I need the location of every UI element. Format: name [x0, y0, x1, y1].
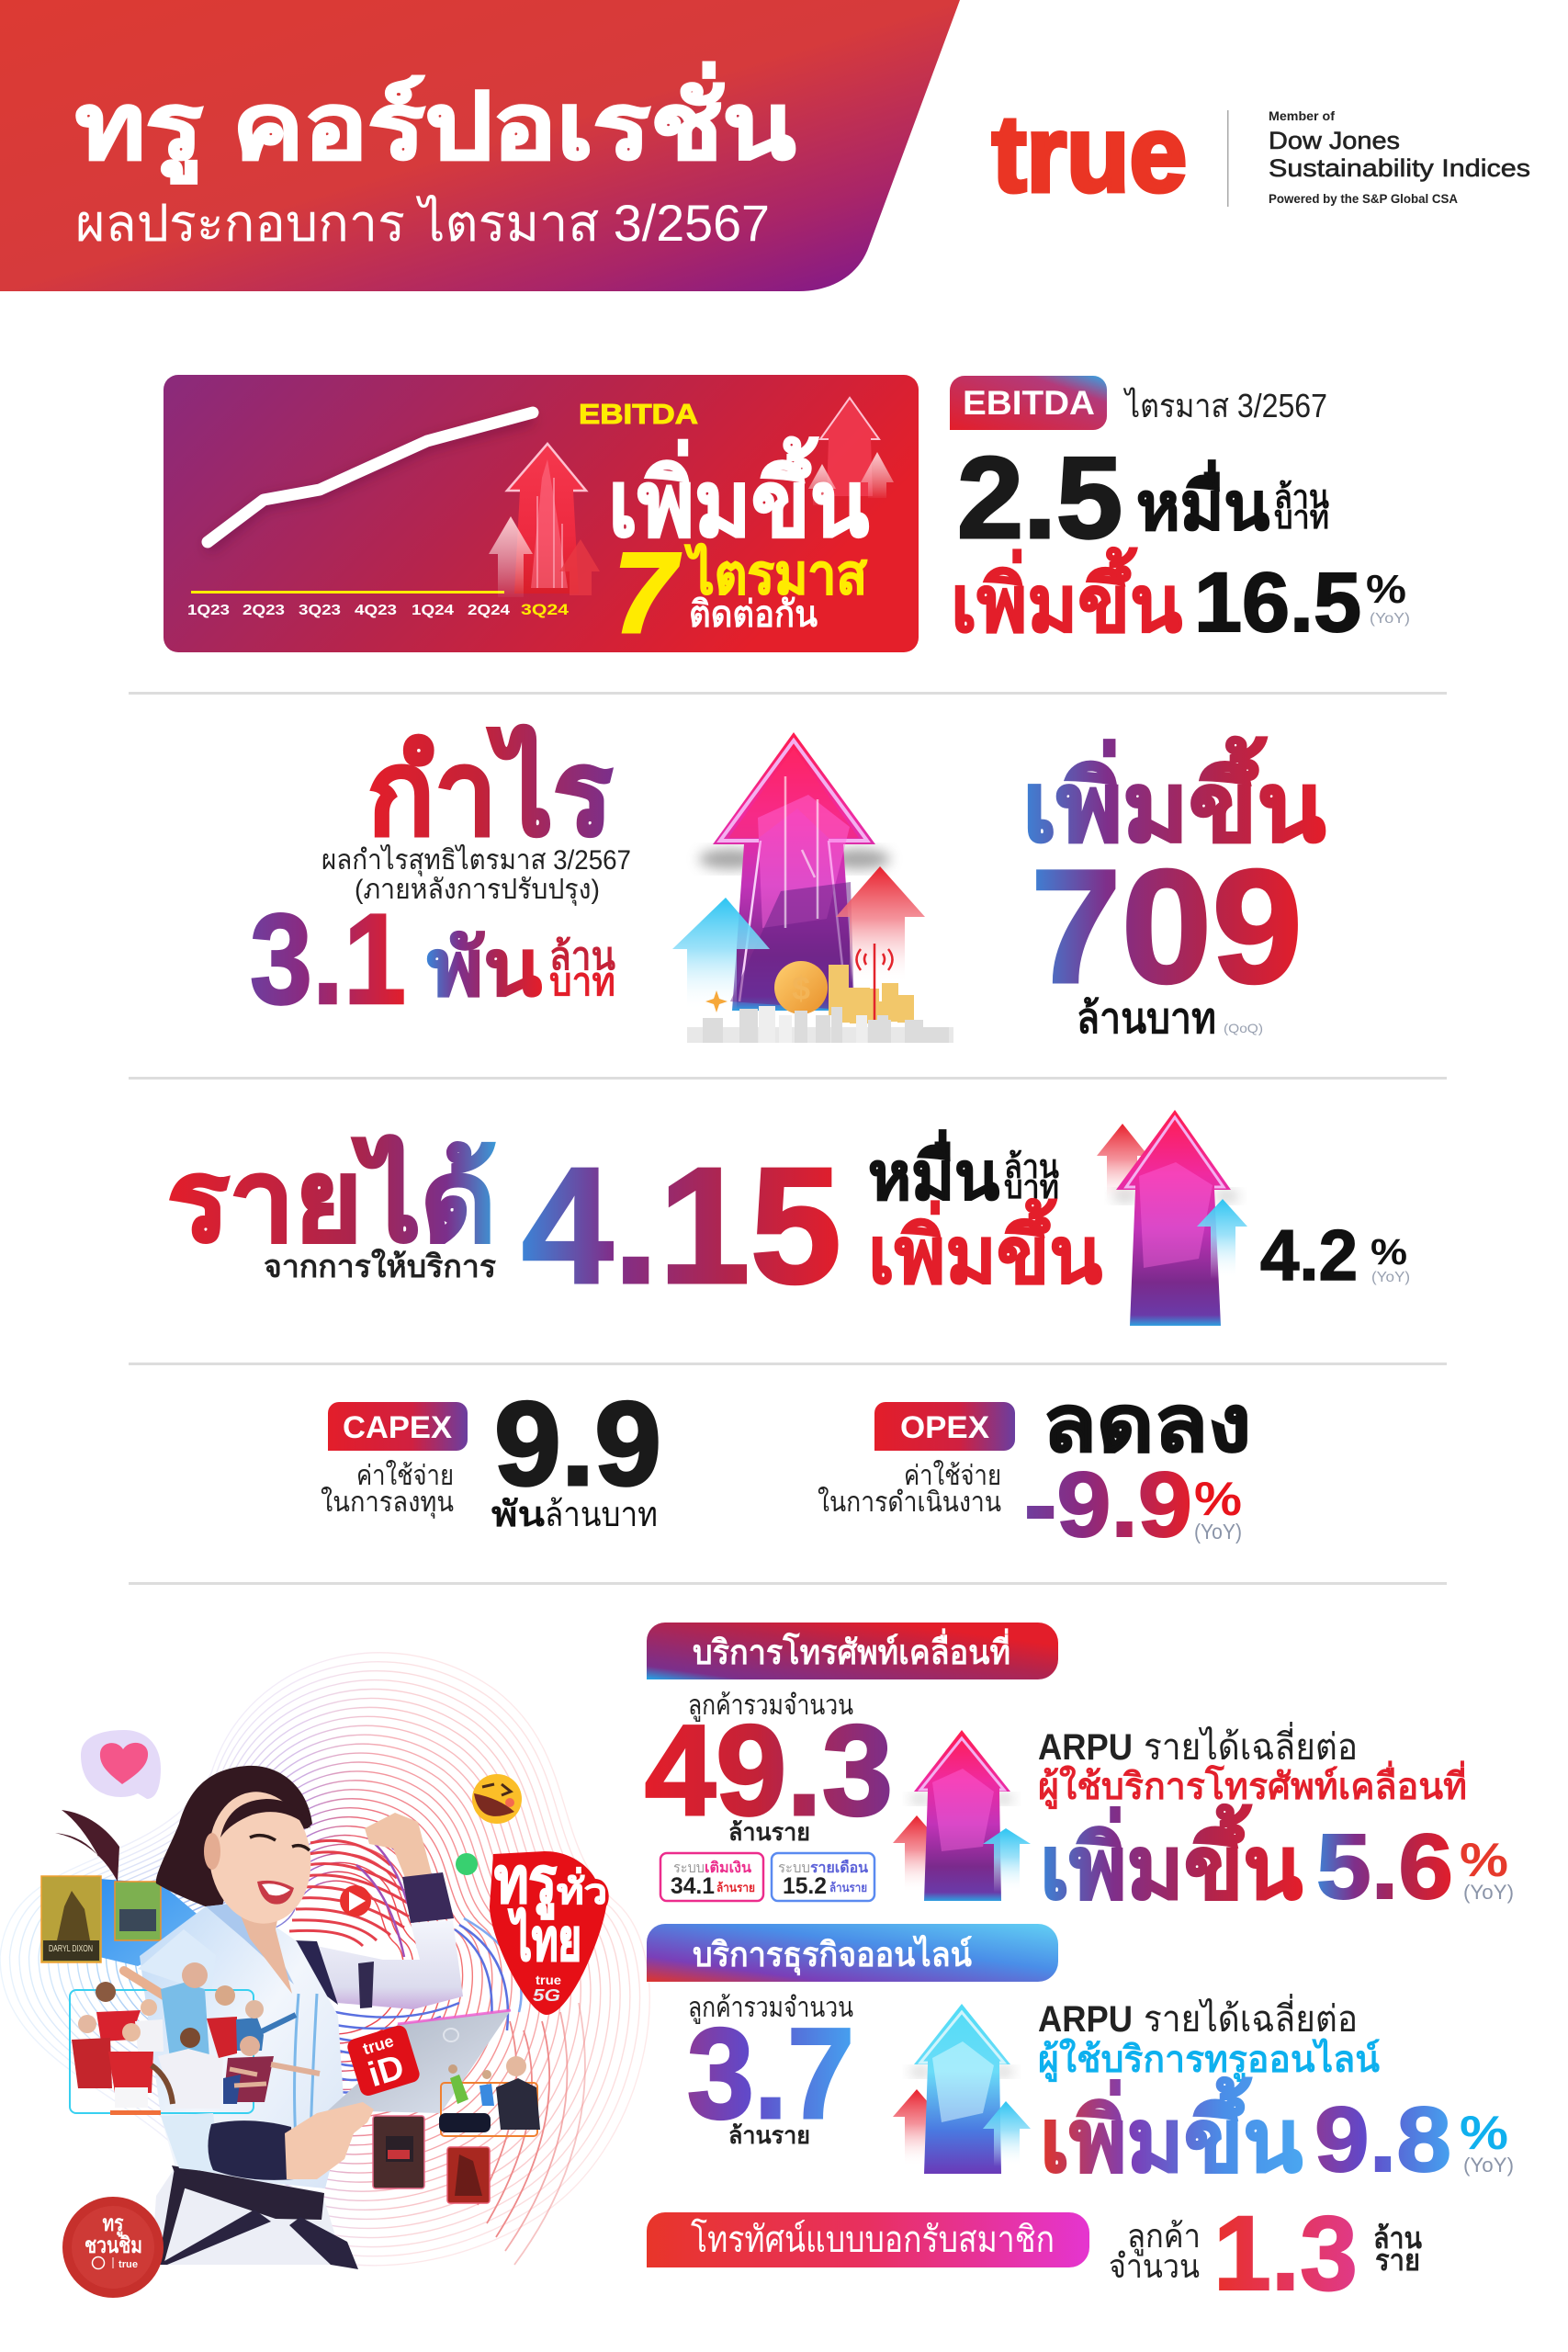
- CAPEX unit: พัน: [491, 1496, 545, 1534]
- EBITDA growth: (YoY): [1370, 611, 1410, 627]
- section: online business: [647, 1924, 1514, 2191]
- ARPU mobile growth: [1040, 1804, 1514, 1918]
- section: revenue: [167, 1110, 1410, 1326]
- icon: laughing emoji: [472, 1774, 522, 1824]
- revenue heading: รายได้: [167, 1136, 496, 1265]
- line chart: 3Q24: [521, 601, 570, 618]
- city skyline: [687, 1006, 953, 1043]
- line chart: 4Q23: [355, 603, 397, 618]
- profit increase unit: ล้านบาท: [1077, 994, 1216, 1042]
- revenue growth value: 4.2: [1260, 1215, 1358, 1295]
- icon: mobile arrows: [893, 1730, 1031, 1901]
- panel: EBITDA increase: [164, 375, 919, 657]
- pay TV unit: ราย: [1375, 2244, 1420, 2277]
- revenue unit: ล้าน: [1004, 1148, 1059, 1185]
- online subscribers value: 3.7: [687, 2001, 854, 2145]
- online subscribers unit: ล้านราย: [728, 2121, 810, 2149]
- profit description: (ภายหลังการปรับปรุง): [355, 875, 600, 907]
- EBITDA unit: [1136, 459, 1329, 544]
- icon: phone: [456, 1853, 478, 1875]
- profit heading: กำไร: [367, 725, 613, 860]
- section: mobile service: [645, 1623, 1514, 1918]
- section: profit: [250, 725, 1325, 1043]
- OPEX description: ค่าใช้จ่าย: [904, 1460, 1001, 1491]
- content tile: olive poster: DARYL DIXON: [49, 1944, 93, 1954]
- line chart: 1Q23: [187, 603, 230, 618]
- badge: true 5G pick: ทั่ว: [557, 1867, 607, 1912]
- woman jacket and raised arm: [138, 1813, 463, 2188]
- seven quarters: ไตรมาส: [683, 542, 867, 605]
- prepaid box: [660, 1853, 763, 1901]
- ARPU online text: ผู้ใช้บริการทรูออนไลน์: [1038, 2038, 1380, 2082]
- OPEX description: ในการดำเนินงาน: [818, 1487, 1001, 1518]
- online heading pill: [647, 1924, 1058, 1982]
- illustration: woman with True ID content: [0, 1653, 649, 2298]
- badge: True invites: true: [118, 2259, 138, 2270]
- OPEX pill: [874, 1402, 1015, 1451]
- content box: sports: [439, 2056, 540, 2136]
- subscribers unit: ล้านราย: [728, 1818, 810, 1846]
- postpaid box: [772, 1853, 874, 1901]
- postpaid box: 15.2: [783, 1873, 827, 1899]
- seven quarters: 7: [614, 530, 681, 657]
- icon: play button: [340, 1885, 371, 1917]
- icon: spark: [705, 990, 728, 1012]
- badge: true 5G pick: true: [536, 1973, 561, 1987]
- ARPU online growth: [1040, 2076, 1514, 2191]
- revenue unit: หมื่น: [868, 1129, 999, 1214]
- woman lower body and harness: [152, 2165, 358, 2269]
- OPEX pill: OPEX: [900, 1410, 989, 1445]
- OPEX value: %: [1194, 1473, 1242, 1526]
- content tile: series poster: [373, 2116, 424, 2188]
- badge: True invites: ชวนชิม: [85, 2233, 142, 2258]
- line chart: [187, 413, 570, 618]
- profit increase value: 709: [1031, 837, 1303, 1017]
- true logo and Dow Jones membership: Member of: [1269, 108, 1335, 123]
- profit value: บาท: [549, 960, 615, 1003]
- EBITDA pill: EBITDA: [963, 384, 1095, 422]
- CAPEX description: ในการลงทุน: [321, 1487, 454, 1520]
- EBITDA unit: หมื่น: [1136, 459, 1269, 544]
- EBITDA figures: [950, 376, 1410, 650]
- profit value: 3.1: [250, 887, 406, 1031]
- revenue growth value: (YoY): [1371, 1270, 1410, 1285]
- profit description: ผลกำไรสุทธิไตรมาส 3/2567: [321, 843, 631, 877]
- profit description: [321, 843, 631, 907]
- icon: revenue arrows: [1097, 1110, 1247, 1326]
- badge: true 5G pick: ไทย: [508, 1907, 581, 1973]
- icon: heart bubble: [81, 1730, 161, 1799]
- ARPU online growth: (YoY): [1463, 2154, 1514, 2177]
- pay TV pill: [647, 2212, 1089, 2267]
- icon: true ID logo: [345, 2023, 422, 2098]
- profit increase unit: (QoQ): [1224, 1021, 1263, 1035]
- EBITDA unit: ล้าน: [1274, 478, 1329, 515]
- pay TV unit: ล้าน: [1373, 2222, 1422, 2255]
- icon: tower: [856, 944, 893, 1020]
- woman neck and face: [201, 1785, 319, 1994]
- ARPU mobile text: ผู้ใช้บริการโทรศัพท์เคลื่อนที่: [1038, 1760, 1467, 1809]
- badge: true 5G pick: [490, 1846, 609, 2015]
- revenue growth value: %: [1371, 1232, 1407, 1272]
- icon: panel arrows: [489, 398, 894, 597]
- illustration: growth arrows with coin and city: [672, 732, 953, 1043]
- EBITDA label: EBITDA: [579, 398, 698, 430]
- prepaid box: เติมเงิน: [705, 1860, 751, 1876]
- ARPU online text: รายได้เฉลี่ยต่อ: [1144, 1994, 1358, 2040]
- CAPEX description: ค่าใช้จ่าย: [356, 1460, 454, 1491]
- revenue unit: [868, 1129, 1059, 1214]
- content tile: olive poster: [41, 1876, 101, 1962]
- ARPU mobile growth: 5.6: [1316, 1815, 1453, 1918]
- CAPEX unit: ล้านบาท: [545, 1496, 658, 1534]
- ARPU mobile growth: %: [1460, 1834, 1508, 1887]
- ARPU online text: [1038, 1994, 1380, 2082]
- badge: True invites: [62, 2197, 164, 2298]
- icon: coin: $: [792, 969, 810, 1007]
- mobile heading pill: [647, 1623, 1058, 1679]
- EBITDA growth: %: [1366, 567, 1406, 612]
- prepaid box: ระบบ: [673, 1860, 705, 1876]
- pay TV label: จำนวน: [1109, 2247, 1200, 2285]
- true logo and Dow Jones membership: true: [992, 94, 1187, 215]
- icon: coin: [774, 961, 828, 1014]
- EBITDA growth: เพิ่มขึ้น: [951, 547, 1182, 649]
- pay TV unit: [1373, 2222, 1422, 2277]
- CAPEX pill: [328, 1402, 468, 1451]
- postpaid box: รายเดือน: [810, 1860, 868, 1876]
- ARPU online text: ARPU: [1038, 1999, 1133, 2040]
- revenue unit: บาท: [1004, 1168, 1059, 1205]
- title: ทรู คอร์ปอเรชั่น: [75, 62, 795, 184]
- section: pay TV: [647, 2195, 1422, 2312]
- seven quarters: [614, 530, 867, 657]
- prepaid box: 34.1: [671, 1873, 715, 1899]
- ARPU mobile growth: (YoY): [1463, 1881, 1514, 1904]
- ARPU mobile text: [1038, 1722, 1467, 1809]
- profit value: พัน: [427, 925, 542, 1012]
- CAPEX pill: CAPEX: [343, 1410, 452, 1445]
- seven quarters: ติดต่อกัน: [689, 594, 818, 635]
- subscribers value: 49.3: [645, 1698, 893, 1842]
- true logo and Dow Jones membership: Sustainability Indices: [1269, 154, 1530, 182]
- EBITDA growth: [951, 547, 1410, 650]
- blue light beam: [99, 1879, 213, 1966]
- OPEX description: [818, 1460, 1001, 1518]
- content tile: group poster: [115, 1882, 161, 1940]
- line chart: 1Q24: [412, 603, 454, 618]
- true logo and Dow Jones membership: Dow Jones: [1269, 127, 1400, 154]
- OPEX value: (YoY): [1194, 1520, 1242, 1544]
- ARPU online growth: เพิ่มขึ้น: [1040, 2076, 1303, 2190]
- EBITDA unit: บาท: [1274, 498, 1329, 536]
- profit value: ล้าน: [549, 934, 615, 978]
- ARPU mobile text: ARPU: [1038, 1727, 1133, 1768]
- revenue value: 4.15: [522, 1134, 841, 1318]
- tablet: [328, 2010, 511, 2113]
- profit value: [250, 887, 615, 1031]
- section: OPEX: [818, 1381, 1251, 1556]
- EBITDA growth: 16.5: [1194, 556, 1361, 650]
- woman hair: [55, 1766, 312, 1913]
- revenue growth value: [1260, 1215, 1410, 1295]
- quarter text: ไตรมาส 3/2567: [1122, 387, 1327, 424]
- online heading pill: บริการธุรกิจออนไลน์: [693, 1934, 972, 1976]
- postpaid box: ล้านราย: [829, 1881, 867, 1894]
- increase text: เพิ่มขึ้น: [608, 436, 869, 556]
- ARPU online growth: 9.8: [1314, 2088, 1451, 2191]
- hand on tablet: [285, 2102, 374, 2179]
- pay TV label: [1109, 2217, 1201, 2285]
- subtitle: ผลประกอบการ ไตรมาส 3/2567: [75, 194, 770, 252]
- online subscribers label: ลูกค้ารวมจำนวน: [688, 1993, 853, 2024]
- line chart: 2Q24: [468, 603, 510, 618]
- pay TV pill: โทรทัศน์แบบบอกรับสมาชิก: [691, 2219, 1055, 2260]
- pay TV label: ลูกค้า: [1127, 2217, 1201, 2256]
- OPEX value: -9.9: [1024, 1453, 1192, 1556]
- wrist cuff: [402, 1872, 454, 1923]
- true logo and Dow Jones membership: Powered by the S&P Global CSA: [1269, 191, 1458, 206]
- EBITDA pill: [950, 376, 1107, 430]
- icon: coin stacks: [829, 965, 914, 1023]
- line chart: 3Q23: [299, 603, 341, 618]
- fist: [365, 1813, 432, 1880]
- pay TV value: 1.3: [1213, 2195, 1358, 2312]
- icon: true ID logo: true: [361, 2031, 396, 2058]
- CAPEX unit: [491, 1496, 658, 1534]
- ARPU online growth: %: [1460, 2107, 1508, 2160]
- badge: true 5G pick: 5G: [533, 1986, 560, 2005]
- background wave lines: [0, 1653, 649, 2266]
- EBITDA value: 2.5: [957, 433, 1122, 562]
- profit increase heading: เพิ่มขึ้น: [1022, 736, 1325, 862]
- mobile heading pill: บริการโทรศัพท์เคลื่อนที่: [693, 1628, 1010, 1671]
- subscribers label: ลูกค้ารวมจำนวน: [688, 1690, 853, 1722]
- section: CAPEX: [321, 1376, 661, 1534]
- revenue subtitle: จากการให้บริการ: [264, 1248, 497, 1284]
- line chart: 2Q23: [243, 603, 285, 618]
- prepaid box: ล้านราย: [716, 1881, 755, 1894]
- content tile: red poster: [447, 2147, 490, 2203]
- revenue increase text: เพิ่มขึ้น: [868, 1198, 1102, 1300]
- OPEX decrease heading: ลดลง: [1043, 1381, 1251, 1468]
- postpaid box: ระบบ: [778, 1860, 810, 1876]
- CAPEX description: [321, 1460, 454, 1520]
- badge: true 5G pick: ทรู: [494, 1846, 557, 1920]
- CAPEX value: 9.9: [494, 1376, 661, 1510]
- ARPU mobile growth: เพิ่มขึ้น: [1040, 1804, 1303, 1917]
- ARPU mobile text: รายได้เฉลี่ยต่อ: [1144, 1722, 1358, 1768]
- icon: true ID logo: iD: [364, 2048, 409, 2095]
- badge: True invites: ทรู: [103, 2211, 124, 2237]
- woman front arm and sleeve: [161, 2113, 294, 2180]
- content box: football players: [70, 1962, 320, 2115]
- header banner: [0, 0, 960, 291]
- icon: online arrows: [893, 2004, 1031, 2174]
- true logo and Dow Jones membership: [992, 94, 1530, 215]
